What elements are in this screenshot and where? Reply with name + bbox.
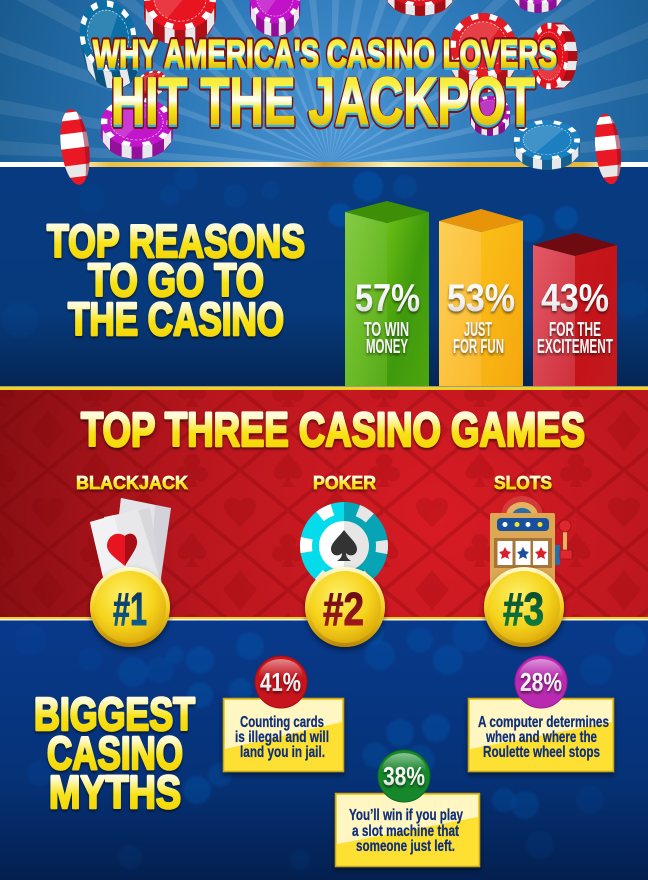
game label: poker: POKER: [313, 473, 376, 493]
icon: slot machine: [490, 496, 572, 591]
myth card: 41% counting cards: Counting cards: [240, 714, 324, 731]
game label: slots: SLOTS: [494, 473, 552, 493]
right edge-on red chip: [592, 112, 626, 185]
left edge-on red chip: [56, 107, 96, 186]
icon: poker chip: [300, 502, 388, 590]
myth card: 38% slot machine: You’ll win if you play: [349, 807, 463, 824]
bar: for the excitement 43%: 43%: [541, 277, 609, 320]
rank badge: #1: [90, 567, 170, 647]
panel: top reasons background: [0, 166, 648, 388]
bar: to win money 57%: [345, 201, 429, 386]
myth card: 38% slot machine: 38%: [383, 761, 425, 791]
bar: for the excitement 43%: [533, 233, 617, 386]
rank badge: #2: #2: [323, 583, 364, 635]
heading: biggest casino myths: CASINO: [47, 727, 183, 779]
rank badge: #3: [484, 567, 564, 647]
myth card: 41% counting cards: land you in jail.: [240, 744, 325, 761]
heading: biggest casino myths: BIGGEST: [34, 688, 195, 740]
myth card: 41% counting cards: 41%: [260, 667, 301, 697]
heading: biggest casino myths: MYTHS: [49, 766, 181, 818]
bar: to win money 57%: MONEY: [366, 336, 408, 358]
myth card: 38% slot machine: a slot machine that: [352, 823, 459, 840]
bar: just for fun 53%: FOR FUN: [453, 336, 504, 358]
title: [93, 33, 557, 141]
myth card: 38% slot machine: [336, 750, 480, 866]
heading: top reasons: TOP REASONS: [47, 215, 305, 267]
heading: top reasons: THE CASINO: [68, 293, 284, 345]
bar: to win money 57%: 57%: [355, 277, 420, 320]
bar: for the excitement 43%: FOR THE: [549, 319, 601, 341]
myth card: 41% counting cards: is illegal and will: [235, 729, 329, 746]
bar: just for fun 53%: JUST: [464, 319, 492, 341]
decorative chips: top: [73, 0, 580, 170]
game label: blackjack: BLACKJACK: [76, 473, 188, 493]
heading: biggest casino myths: [34, 688, 195, 818]
myth card: 28% roulette: 28%: [520, 667, 562, 697]
bar: to win money 57%: TO WIN: [364, 319, 409, 341]
myth card: 28% roulette: Roulette wheel stops: [483, 744, 600, 761]
myth card: 28% roulette: A computer determines: [478, 714, 609, 731]
panel: myths background: [0, 617, 648, 880]
header background: [0, 0, 648, 180]
heading: top reasons: [47, 215, 305, 345]
myth card: 28% roulette: when and where the: [485, 729, 597, 746]
bar: just for fun 53%: [439, 209, 523, 386]
bar chart: top reasons: [345, 201, 617, 386]
myth card: 38% slot machine: someone just left.: [356, 838, 455, 855]
gold divider top: [0, 162, 648, 167]
icon: playing cards: [90, 498, 171, 590]
rank badge: #2: [305, 567, 385, 647]
myth card: 41% counting cards: [224, 656, 344, 772]
rank badge: #3: #3: [503, 583, 544, 635]
rank badge: #1: #1: [113, 583, 147, 635]
heading: top reasons: TO GO TO: [88, 254, 264, 306]
panel: top three casino games background: [0, 386, 648, 618]
bar: just for fun 53%: 53%: [447, 277, 515, 320]
myth card: 28% roulette: [468, 656, 614, 772]
